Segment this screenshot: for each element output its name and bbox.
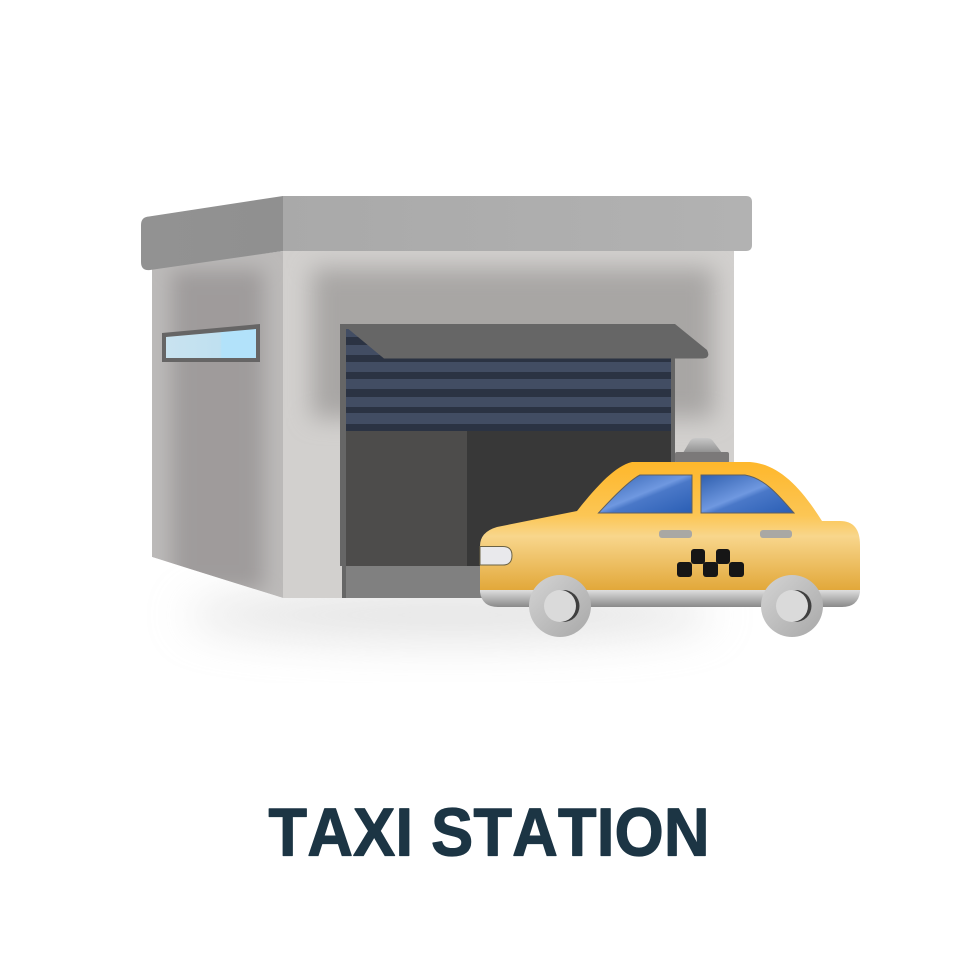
front wall (283, 251, 734, 598)
building (141, 196, 752, 598)
car body (480, 462, 860, 590)
awning (346, 324, 708, 358)
front wheel (529, 575, 591, 637)
garage door frame (340, 324, 675, 598)
door handle front (659, 530, 692, 538)
roof front (283, 196, 752, 251)
headlight (480, 546, 512, 565)
rear wheel (761, 575, 823, 637)
front window (598, 475, 692, 513)
ground shadow (185, 589, 715, 641)
taxi checker mark (677, 549, 744, 577)
side wall (152, 251, 283, 598)
rear window (701, 475, 794, 513)
infographic: taxi station icon with caption (141, 196, 860, 857)
bumper (480, 588, 860, 607)
roller shutter (346, 329, 671, 431)
roof side (141, 196, 283, 270)
garage door interior (346, 431, 671, 598)
taxi car (480, 438, 860, 637)
door handle rear (760, 530, 792, 538)
roof sign (675, 438, 729, 463)
side window (162, 324, 260, 362)
title: TAXI STATION (268, 794, 710, 870)
